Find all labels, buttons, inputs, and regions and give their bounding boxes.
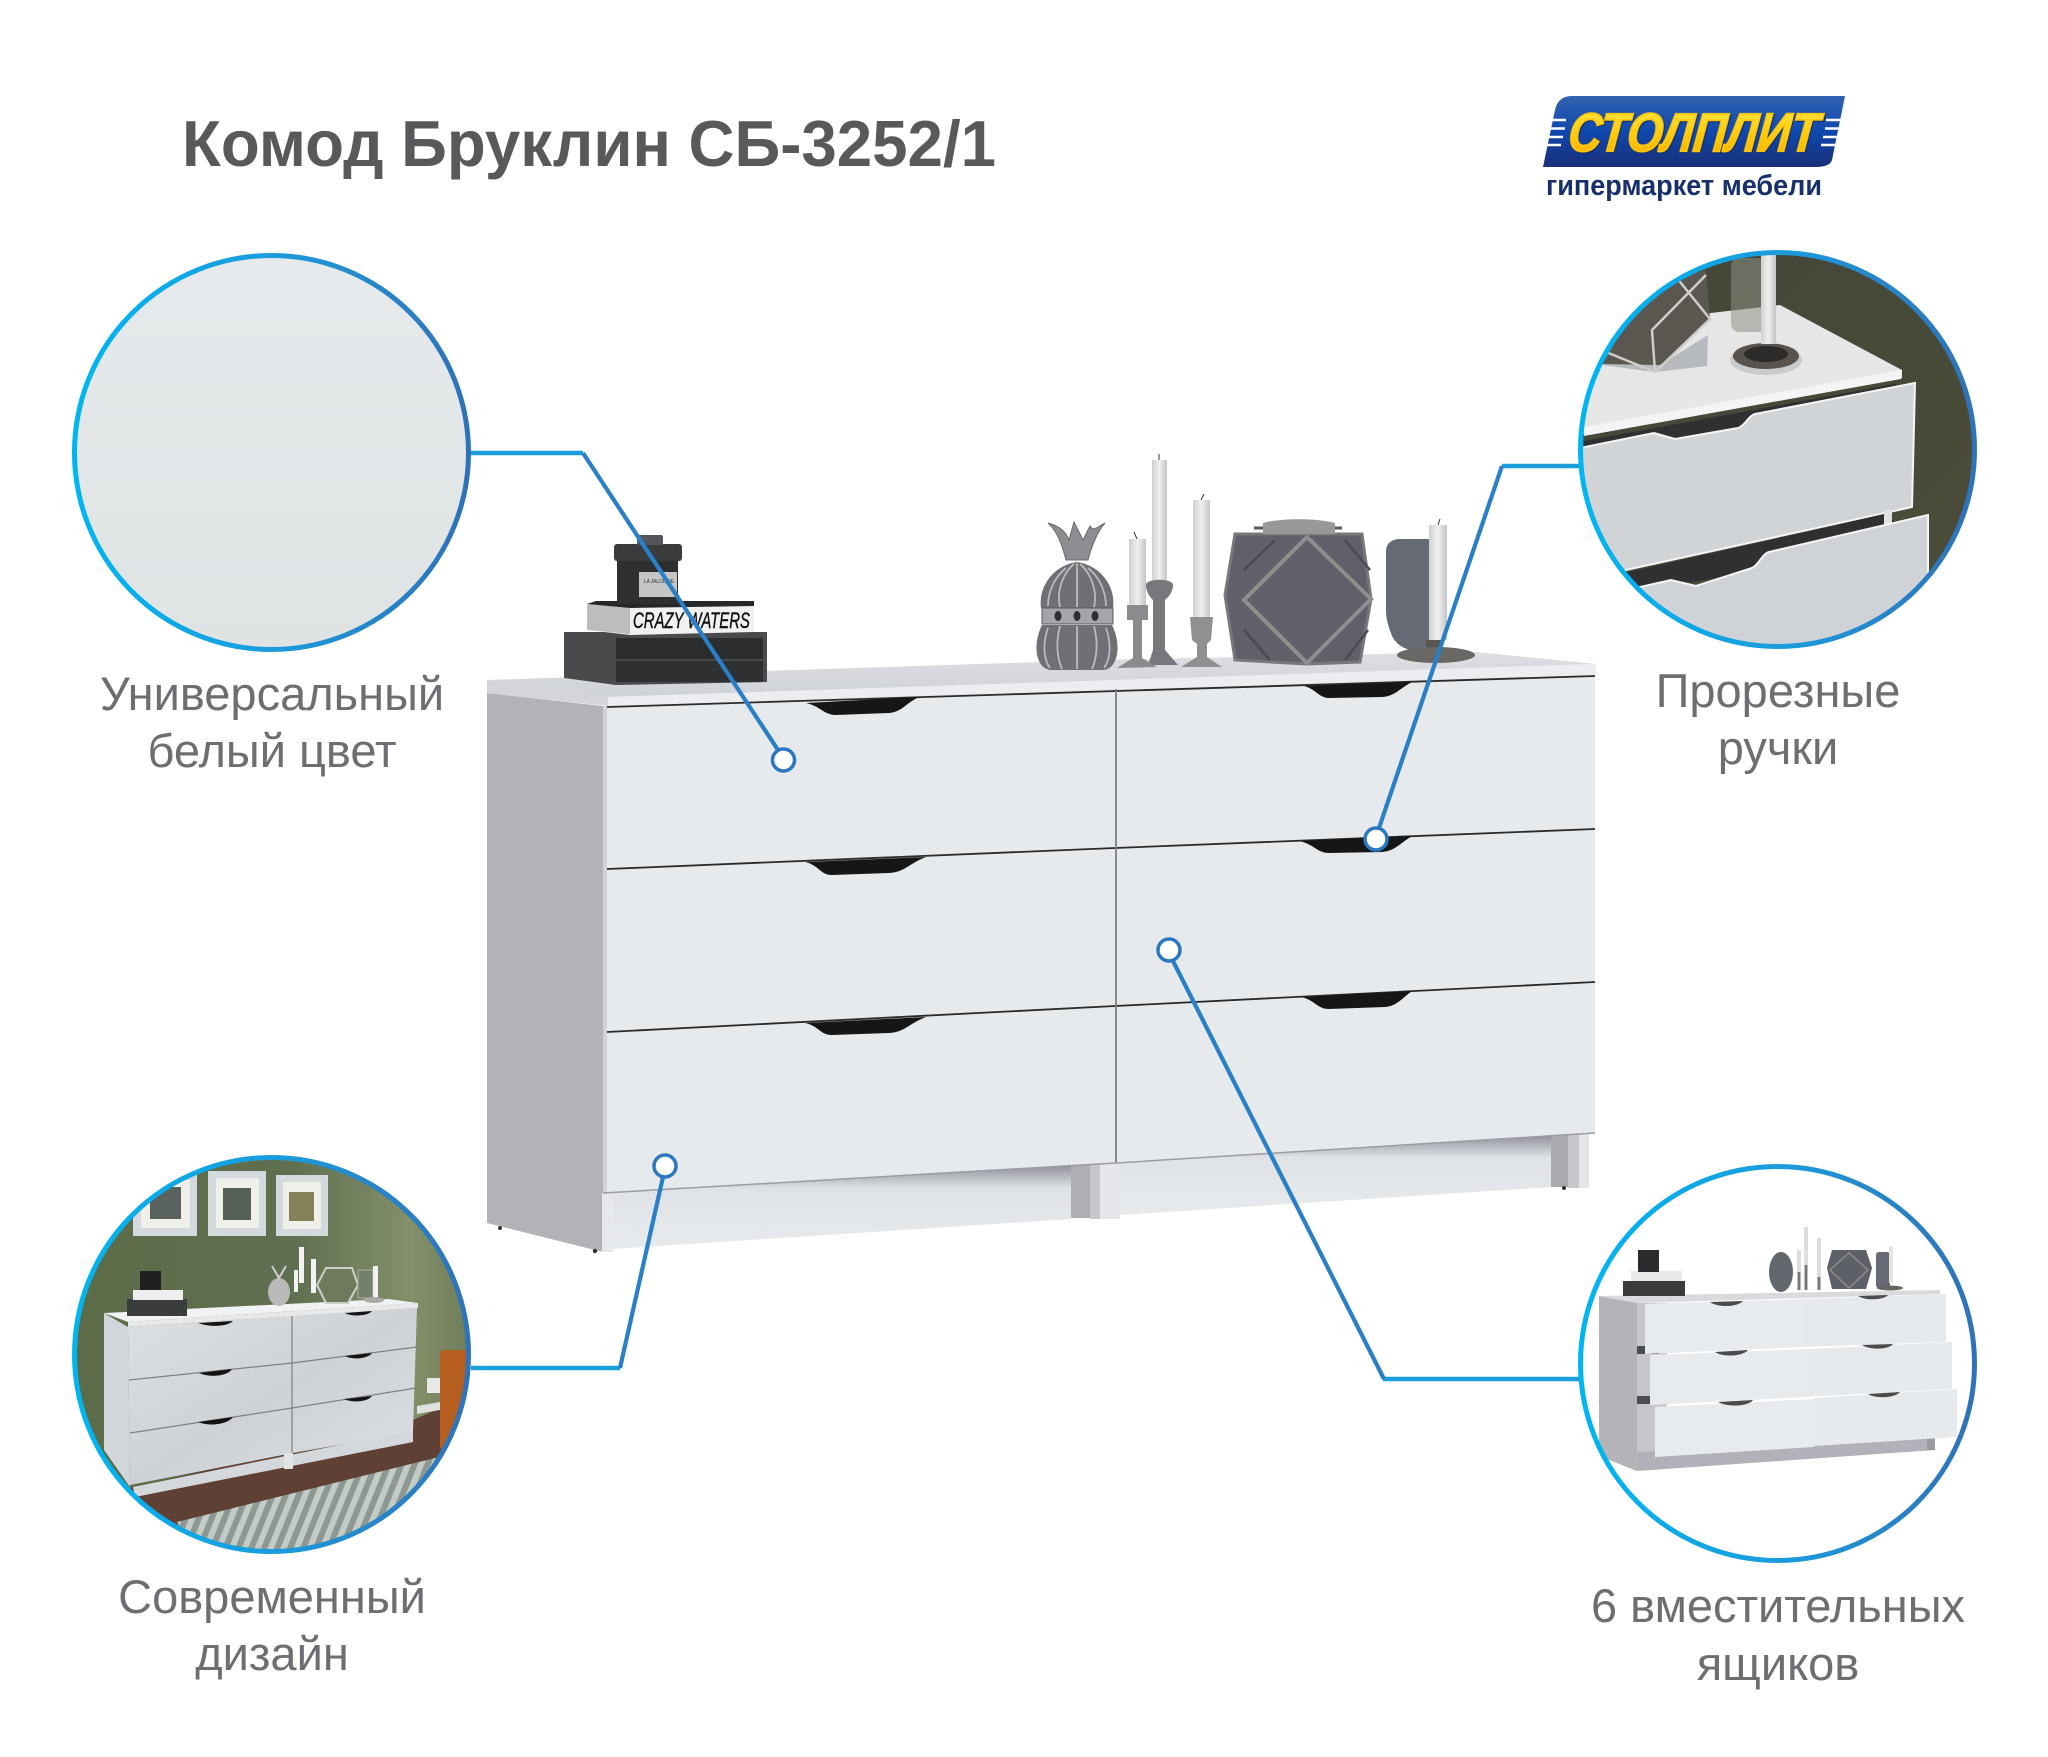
- ring: [74, 1158, 468, 1552]
- decor: jar and books: [564, 535, 767, 685]
- logo subtitle: гипермаркет мебели: [1546, 170, 1822, 202]
- label: cut-out handles: [1656, 664, 1900, 774]
- callout circle: six drawers open: [1580, 1166, 1974, 1560]
- lantern close-up: [1598, 270, 1710, 372]
- logo wordmark: СТОЛПЛИТ: [1566, 103, 1825, 163]
- floor: [130, 1410, 442, 1526]
- orange armchair: [440, 1350, 468, 1450]
- rug: [177, 1458, 436, 1549]
- label: modern design: [118, 1570, 426, 1680]
- label: white colour: белый цвет: [148, 724, 396, 777]
- title: Комод Бруклин СБ-3252/1: [182, 107, 996, 180]
- logo badge: [1543, 96, 1845, 167]
- decor: jar and books: LA JALOUSIE: [644, 579, 675, 585]
- decor: candlesticks: [1117, 454, 1440, 668]
- open-drawers dresser: [1599, 1290, 1957, 1471]
- decor miniature: [1623, 1227, 1903, 1296]
- dresser plinth: [498, 1134, 1589, 1253]
- callout line: colour: [471, 453, 794, 771]
- cabinet top: [1570, 305, 1902, 435]
- callout line: handles: [1365, 466, 1579, 850]
- wall: [1583, 255, 1972, 585]
- label: modern design: Современный: [118, 1570, 426, 1623]
- logo: Столплит: [1543, 96, 1848, 202]
- decor: geometric lantern: [1225, 519, 1371, 664]
- lower drawer close-up: [1627, 510, 1929, 644]
- green wall: [77, 1160, 466, 1489]
- dresser drawer fronts: [603, 689, 1116, 1193]
- decor miniature: [127, 1247, 384, 1316]
- callout circle: cut-out handles close-up: [1570, 250, 1978, 660]
- logo stripes: [1545, 120, 1848, 145]
- dresser miniature: [104, 1299, 418, 1497]
- dresser handles: [805, 682, 1412, 1035]
- dresser top surface: [487, 652, 1596, 697]
- decor: jar and books: CRAZY WATERS: [633, 608, 750, 633]
- baseboard: [417, 1402, 440, 1414]
- wall socket: [427, 1378, 440, 1393]
- callout line: design: [471, 1155, 676, 1368]
- label: six drawers: 6 вместительных: [1591, 1579, 1965, 1632]
- upper drawer close-up: [1575, 383, 1915, 580]
- label: six drawers: [1591, 1579, 1965, 1690]
- ring: [1580, 252, 1974, 646]
- label: white colour: Универсальный: [100, 667, 444, 720]
- label: white colour: [100, 667, 444, 777]
- glass and candle close-up: [1730, 254, 1802, 375]
- label: cut-out handles: ручки: [1718, 721, 1838, 774]
- decor: vase and candle: [1386, 525, 1475, 663]
- callout circle: white colour texture: [74, 256, 468, 650]
- label: cut-out handles: Прорезные: [1656, 664, 1900, 717]
- decor: pineapple figurine: [1036, 522, 1118, 670]
- label: six drawers: ящиков: [1697, 1637, 1859, 1690]
- dresser side panel: [487, 693, 603, 1252]
- ring: [1580, 1166, 1974, 1560]
- dresser: main product: [487, 454, 1596, 1253]
- label: modern design: дизайн: [195, 1627, 349, 1680]
- wall frames: [133, 1171, 328, 1236]
- callout line: six drawers: [1158, 939, 1579, 1379]
- callout circle: interior scene: [72, 1155, 480, 1560]
